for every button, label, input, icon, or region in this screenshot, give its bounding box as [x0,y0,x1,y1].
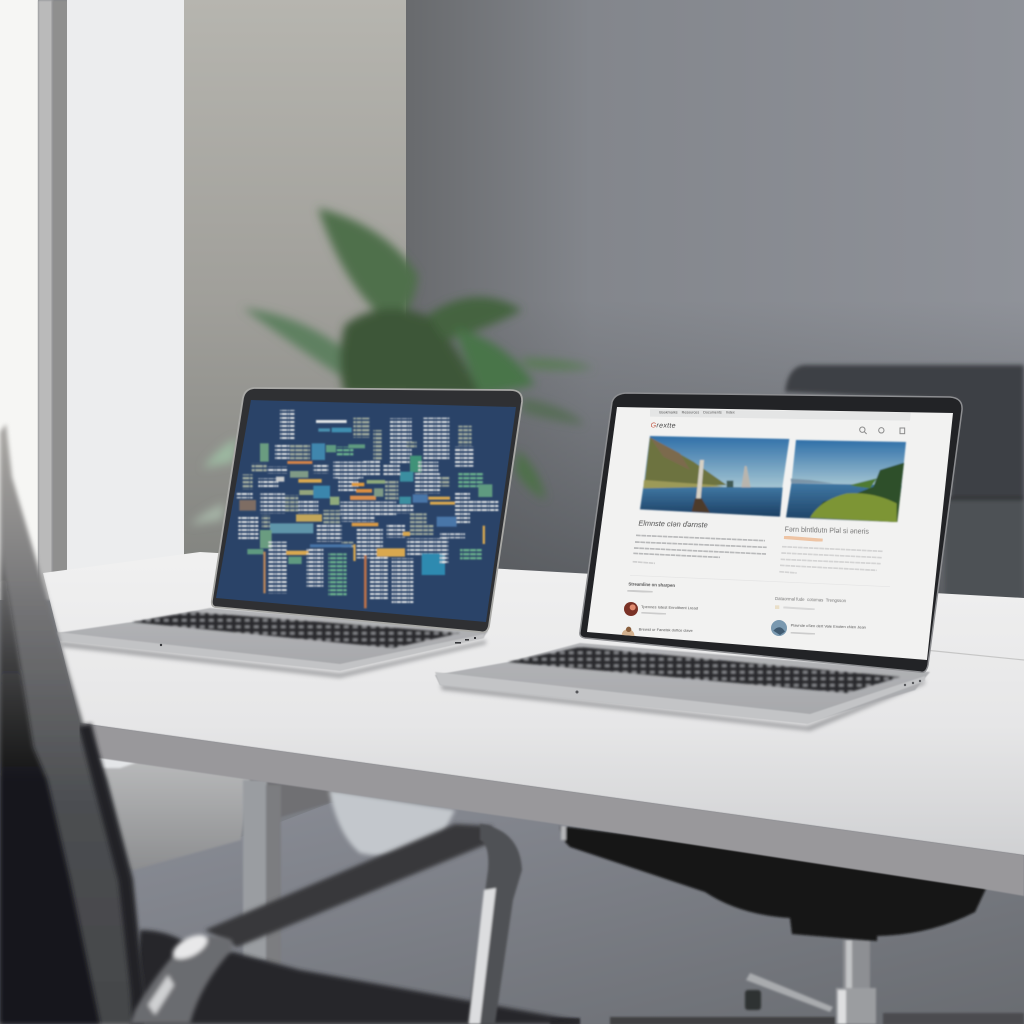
toolbar icons [860,427,905,434]
right laptop front lip [435,672,925,724]
left article heading: Elmnste cIən ďərnste [638,518,708,529]
plant [190,208,594,525]
left screen word map [237,410,498,608]
list item two: Brewst ur Faneisk dofice clave [639,627,694,633]
left laptop lid [212,388,522,632]
site logo: Grextte [651,422,676,430]
floor [130,803,1024,1024]
table top [43,552,1024,855]
chair seat [130,930,578,1024]
foreground chair left [0,424,578,1024]
toolbar tabs: Bookmarks Resources Documents Index [659,411,735,415]
right laptop [435,393,962,724]
left laptop front lip [57,632,484,671]
left list heading: Streamline on sharpen [628,581,675,588]
right laptop keyboard [508,647,900,693]
left laptop keyboard [132,612,460,648]
right article heading: Fərn blntldutn Pləl si əneris [785,526,870,536]
hero photo: mountain and sea [640,436,789,517]
lower wall [94,755,340,870]
avatar: blue portrait [771,620,787,636]
table leg [243,780,281,965]
left article body lines [633,535,767,563]
right article body lines [779,547,883,573]
chair arm joint [130,930,232,1024]
laptop shadows [60,640,925,731]
section divider [630,575,890,587]
left laptop [57,388,522,671]
left laptop base [57,608,488,670]
left laptop ports [160,637,476,646]
chair arm tube [205,824,492,947]
right chair pole [836,940,876,1024]
plant pot [329,790,455,856]
right chair seat and base [550,826,1024,1024]
right article orange subtitle [784,537,823,540]
chair back cushion [0,540,100,1024]
left laptop screen [216,400,516,622]
list item three: Plavnde cSen dert Vale Enoten cNen Jean [791,623,866,630]
right chair legs [550,973,1024,1024]
avatar: red portrait [624,602,638,616]
right list heading: Dataormal fude cotomas Trengsson [775,596,847,603]
right screen web page [622,409,911,636]
chair arm post [467,824,522,1024]
avatar: tan portrait [622,627,634,636]
right laptop screen [587,407,953,660]
hero photo: green shore [786,440,906,522]
chair back frame [0,424,145,1024]
right chair seat [560,826,990,941]
right laptop base [435,643,930,723]
list item one: Tpennes Iotest Enrolthent Lread [641,604,698,610]
right laptop ports and dots [576,680,921,694]
right office chair back [785,365,1024,600]
chair back edge [85,725,139,1024]
browser toolbar [650,409,911,421]
right laptop lid [580,393,962,672]
table front edge [80,723,1024,896]
